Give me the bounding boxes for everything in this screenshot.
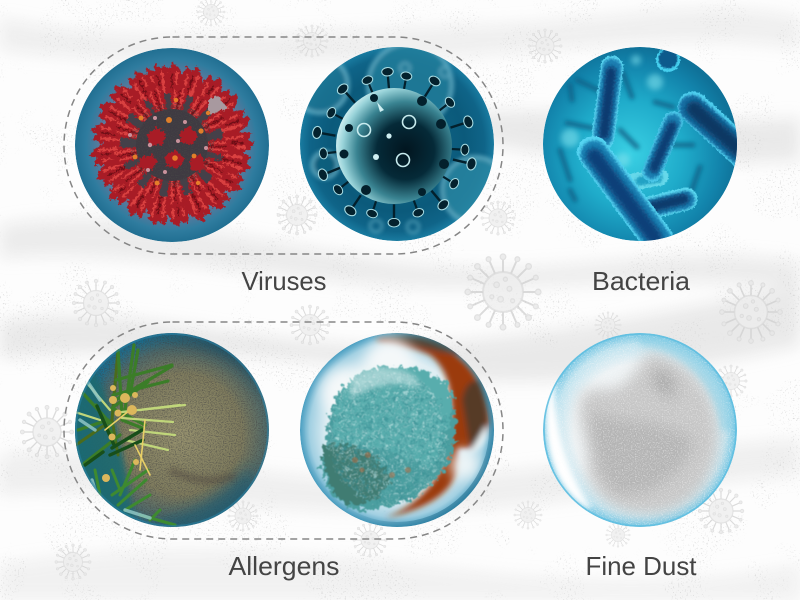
circle: fine dust particles: [543, 333, 737, 527]
blurred background viruses: [306, 47, 493, 236]
panel: fine dust: [543, 333, 737, 581]
dashed outline: allergens group: [64, 322, 503, 539]
circle: teal mold: [300, 333, 494, 527]
label: Fine Dust: Fine Dust: [586, 551, 697, 581]
orange-brown agar: [375, 334, 489, 518]
blurred background rods: [560, 73, 700, 200]
circle: pine pollen: [70, 333, 270, 530]
label: Viruses: Viruses: [242, 266, 326, 296]
circle: blue rod bacteria: [543, 47, 745, 241]
circle: red coronavirus: [75, 48, 269, 242]
fungal colony: [318, 362, 458, 512]
panel: allergens: [64, 322, 503, 581]
dashed outline: viruses group: [64, 37, 503, 254]
label: Allergens: Allergens: [228, 551, 340, 581]
panel: viruses: [64, 37, 508, 296]
circle: blue influenza virus: [300, 47, 494, 241]
label: Bacteria: Bacteria: [592, 266, 691, 296]
pine branch: [75, 345, 185, 525]
panel: bacteria: [543, 47, 745, 296]
rod bacteria: [593, 48, 745, 240]
